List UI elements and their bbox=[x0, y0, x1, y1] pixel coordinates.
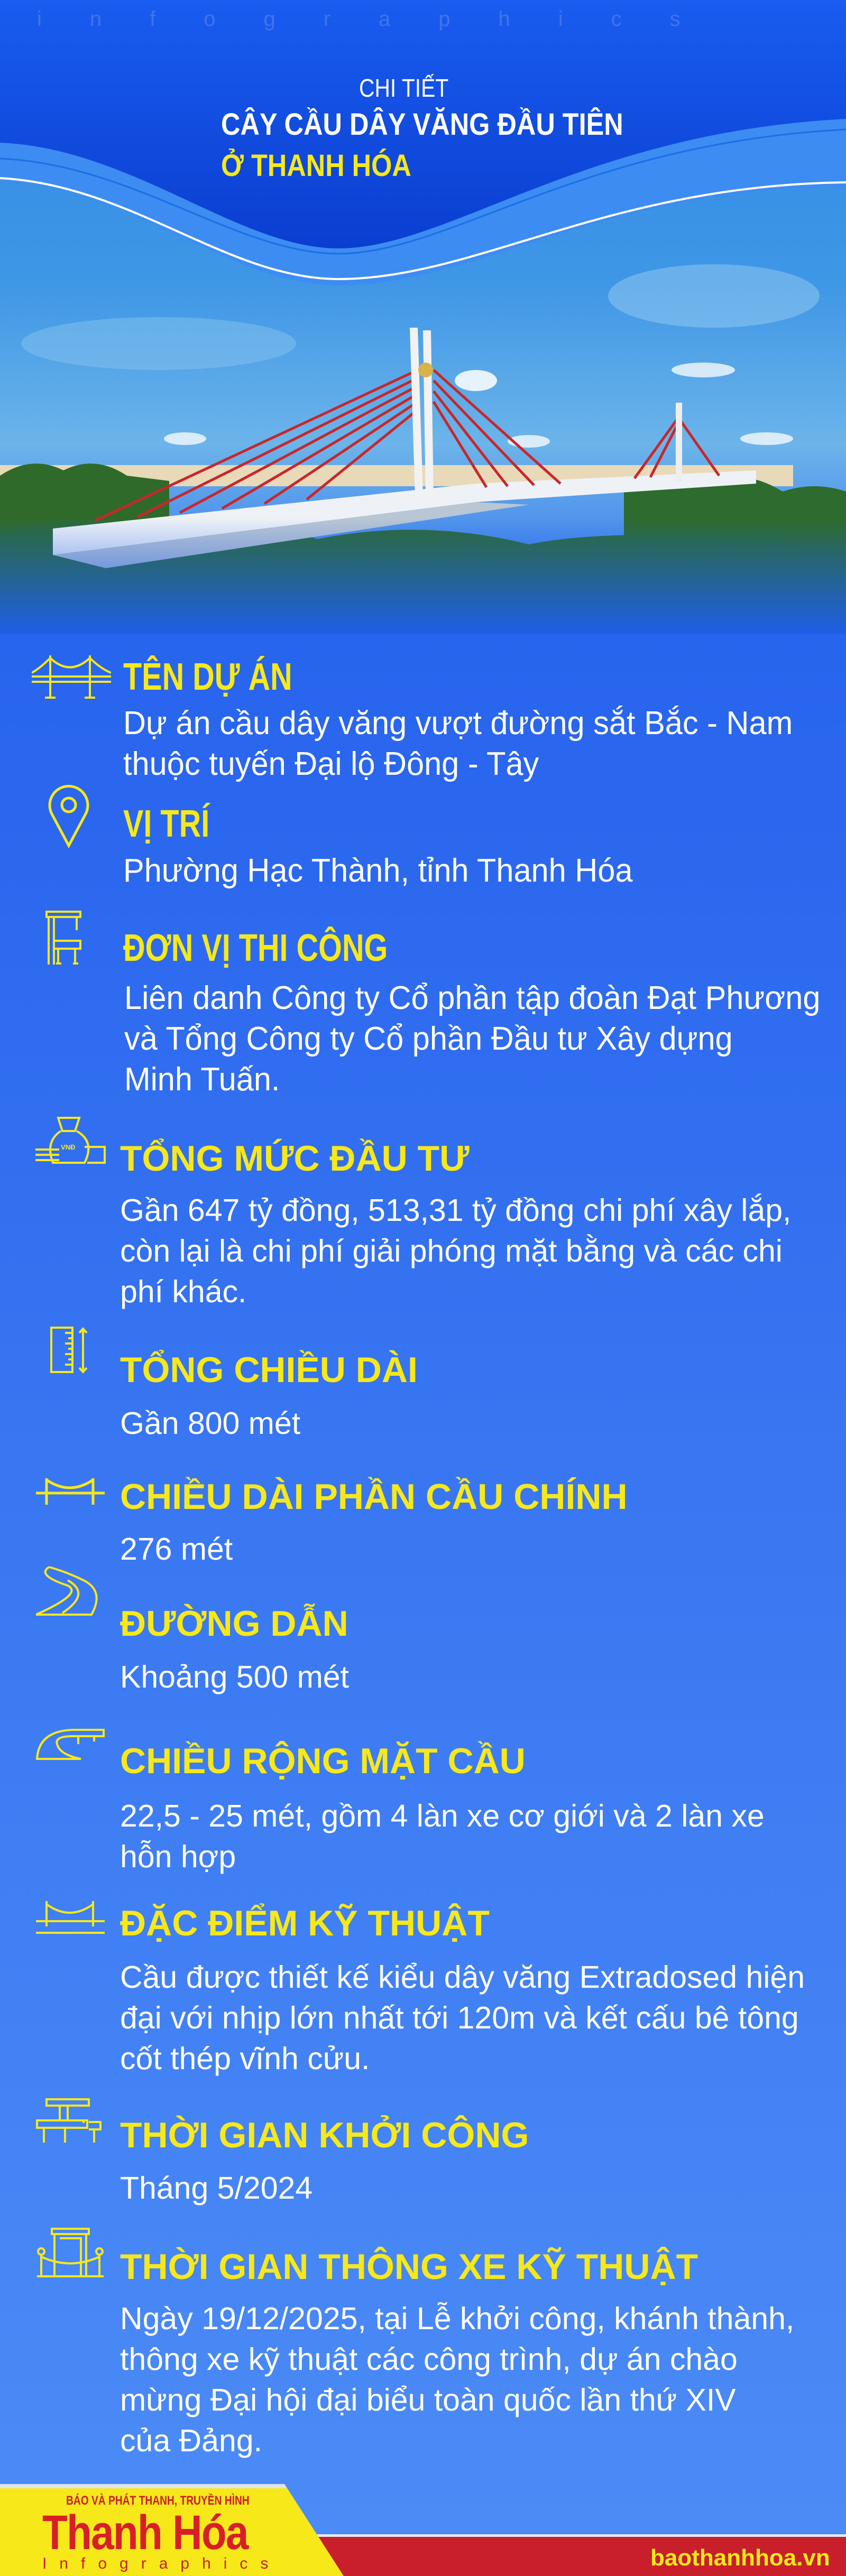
body text: Cầu được thiết kế kiểu dây văng Extradosed hiện bbox=[120, 1960, 805, 1995]
icon: elevated road bbox=[36, 1729, 105, 1760]
body text: Dự án cầu dây văng vượt đường sắt Bắc - Nam bbox=[123, 705, 793, 742]
title bbox=[221, 74, 623, 183]
body text: Gần 647 tỷ đồng, 513,31 tỷ đồng chi phí xây lắp, bbox=[120, 1193, 791, 1228]
item: don vi thi cong bbox=[45, 911, 821, 1098]
icon: money bag bbox=[35, 1117, 106, 1164]
body text: cốt thép vĩnh cửu. bbox=[120, 2041, 370, 2076]
heading: VỊ TRÍ bbox=[123, 803, 209, 845]
pylons bbox=[410, 328, 434, 497]
body text: Phường Hạc Thành, tỉnh Thanh Hóa bbox=[123, 853, 632, 889]
body text: mừng Đại hội đại biểu toàn quốc lần thứ XIV bbox=[120, 2383, 736, 2417]
icon: money bag: VNĐ bbox=[61, 1143, 75, 1151]
icon: construction crane bbox=[36, 2098, 102, 2143]
icon: ribbon gate bbox=[37, 2228, 104, 2277]
buildings bbox=[0, 465, 793, 486]
watermark: infographics: infographics bbox=[37, 7, 729, 31]
logo bbox=[42, 2494, 281, 2572]
heading: TỔNG MỨC ĐẦU TƯ bbox=[120, 1138, 470, 1179]
logo: BÁO VÀ PHÁT THANH, TRUYỀN HÌNH bbox=[66, 2494, 250, 2508]
body text: đại với nhịp lớn nhất tới 120m và kết cấu bê tông bbox=[120, 2000, 799, 2035]
body text: 276 mét bbox=[120, 1532, 233, 1567]
website: baothanhhoa.vn bbox=[650, 2545, 830, 2571]
body text: còn lại là chi phí giải phóng mặt bằng và các chi bbox=[120, 1234, 783, 1268]
logo: Thanh Hóa bbox=[42, 2506, 248, 2560]
body text: Gần 800 mét bbox=[120, 1406, 300, 1441]
body text: Tháng 5/2024 bbox=[120, 2171, 312, 2206]
icon: location pin bbox=[49, 785, 89, 848]
cables bbox=[95, 370, 719, 521]
body text: Khoảng 500 mét bbox=[120, 1660, 349, 1694]
heading: TỔNG CHIỀU DÀI bbox=[120, 1350, 418, 1390]
body text: Liên danh Công ty Cổ phần tập đoàn Đạt Phương bbox=[124, 980, 821, 1016]
heading: THỜI GIAN THÔNG XE KỸ THUẬT bbox=[120, 2247, 698, 2287]
heading: ĐƯỜNG DẪN bbox=[120, 1604, 348, 1644]
bridge deck bbox=[53, 470, 756, 555]
body text bbox=[120, 1799, 765, 1874]
icon: ruler bbox=[50, 1327, 88, 1374]
body text: 22,5 - 25 mét, gồm 4 làn xe cơ giới và 2 làn xe bbox=[120, 1799, 765, 1833]
icon: road bbox=[36, 1566, 98, 1616]
heading: ĐẶC ĐIỂM KỸ THUẬT bbox=[120, 1903, 490, 1943]
heading: CHIỀU RỘNG MẶT CẦU bbox=[120, 1741, 526, 1781]
body text: phí khác. bbox=[120, 1274, 246, 1309]
item: ten du an bbox=[32, 655, 793, 782]
body text bbox=[120, 1960, 805, 2076]
item: chieu dai phan cau chinh bbox=[36, 1477, 628, 1567]
heading: TÊN DỰ ÁN bbox=[123, 656, 292, 698]
icon: suspension bridge bbox=[36, 1478, 105, 1505]
body text bbox=[120, 1193, 791, 1309]
item: thoi gian khoi cong bbox=[36, 2098, 529, 2206]
logo: Infographics bbox=[42, 2555, 281, 2572]
item: tong chieu dai bbox=[50, 1327, 418, 1441]
item: vi tri bbox=[49, 785, 632, 889]
trees bbox=[0, 464, 169, 555]
icon: bridge bbox=[36, 1901, 105, 1934]
body text bbox=[123, 705, 793, 782]
item: thoi gian thong xe bbox=[37, 2228, 794, 2458]
footer bbox=[0, 2484, 846, 2576]
body text bbox=[124, 980, 821, 1098]
title: CHI TIẾT bbox=[359, 75, 448, 103]
heading: ĐƠN VỊ THI CÔNG bbox=[123, 927, 388, 969]
wave band bbox=[0, 119, 846, 285]
icon: bridge bbox=[32, 655, 111, 699]
icon: crane bbox=[45, 911, 81, 965]
item: duong dan bbox=[36, 1566, 349, 1694]
item: chieu rong mat cau bbox=[36, 1729, 765, 1874]
body text: và Tổng Công ty Cổ phần Đầu tư Xây dựng bbox=[124, 1021, 733, 1057]
body text: Ngày 19/12/2025, tại Lễ khởi công, khánh thành, bbox=[120, 2301, 794, 2336]
heading: THỜI GIAN KHỞI CÔNG bbox=[120, 2115, 529, 2155]
title: Ở THANH HÓA bbox=[221, 149, 411, 183]
body text: thuộc tuyến Đại lộ Đông - Tây bbox=[123, 746, 539, 782]
body text: Minh Tuấn. bbox=[124, 1061, 280, 1098]
header background with photo bbox=[0, 39, 846, 634]
body text: của Đảng. bbox=[120, 2423, 262, 2458]
title: CÂY CẦU DÂY VĂNG ĐẦU TIÊN bbox=[221, 107, 623, 142]
item: dac diem ky thuat bbox=[36, 1901, 805, 2076]
body text: hỗn hợp bbox=[120, 1839, 236, 1874]
heading: CHIỀU DÀI PHẦN CẦU CHÍNH bbox=[120, 1477, 628, 1517]
body text: thông xe kỹ thuật các công trình, dự án chào bbox=[120, 2342, 738, 2377]
item: tong muc dau tu bbox=[35, 1117, 791, 1309]
body text bbox=[120, 2301, 794, 2458]
